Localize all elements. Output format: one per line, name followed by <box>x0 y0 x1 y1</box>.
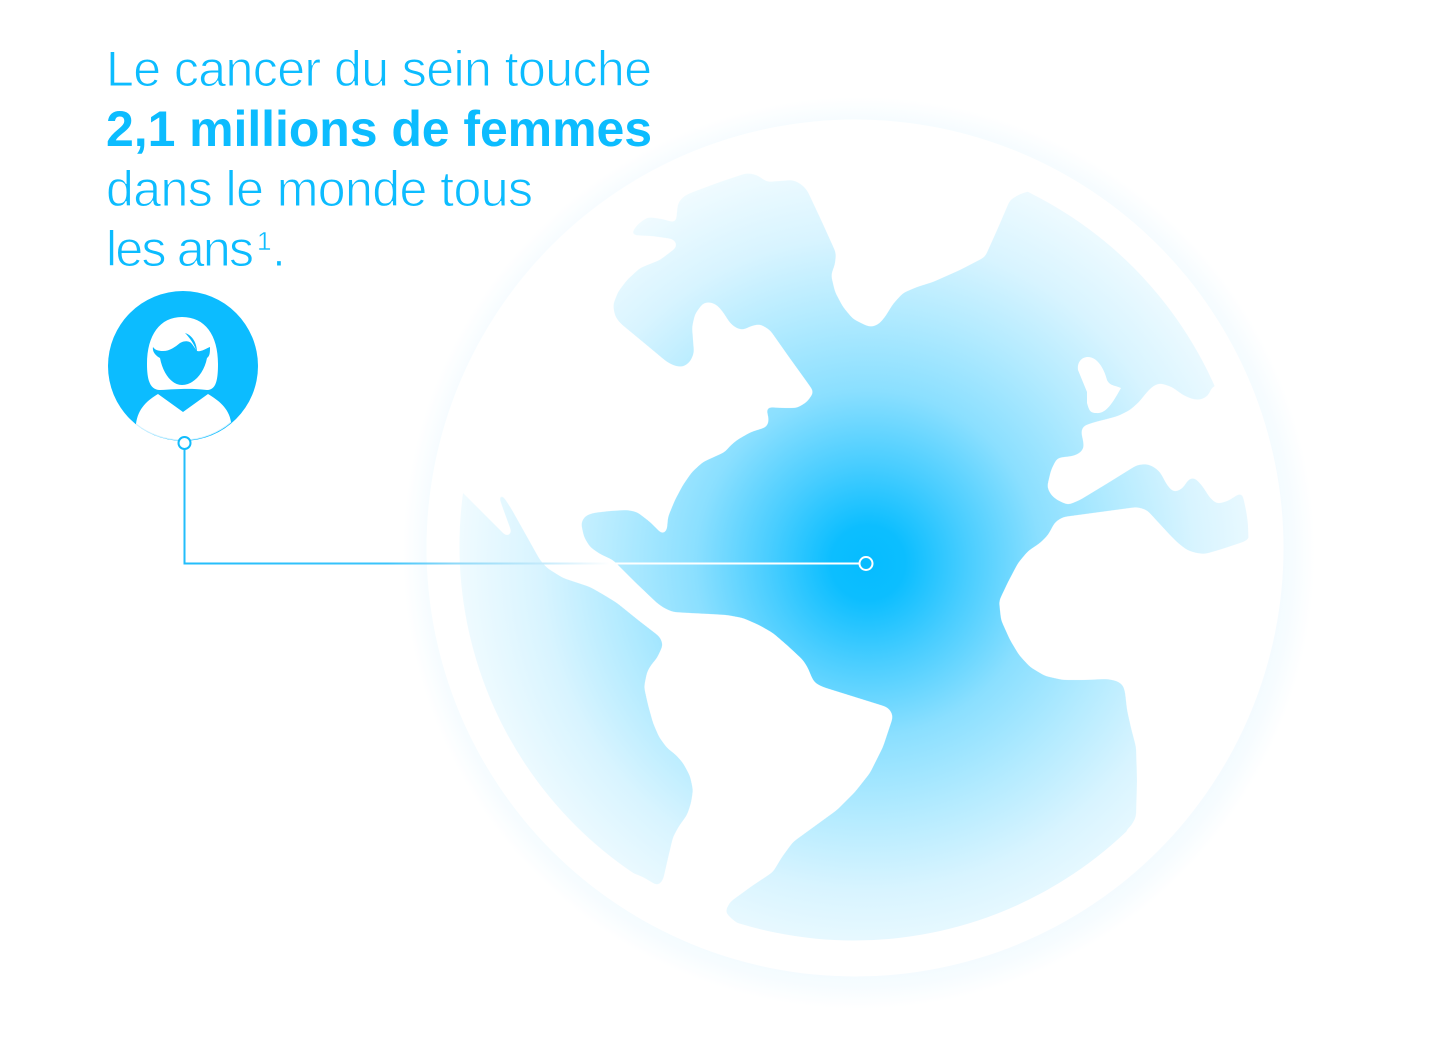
headline text: 1 <box>257 226 271 256</box>
avatar hair <box>147 317 218 390</box>
marker: globe ring <box>860 557 872 570</box>
globe <box>403 97 1315 1009</box>
headline text: 2,1 millions de femmes <box>106 101 652 157</box>
avatar body <box>136 394 231 440</box>
headline text <box>106 41 652 277</box>
globe halo <box>403 97 1315 1009</box>
connector line <box>184 449 859 564</box>
headline text: . <box>272 221 286 277</box>
avatar lower arc <box>136 422 231 440</box>
marker: top ring <box>178 437 190 449</box>
globe white disc <box>426 120 1284 976</box>
avatar hair strand <box>185 333 197 352</box>
headline text: Le cancer du sein touche <box>106 41 652 97</box>
avatar circle <box>108 291 258 441</box>
headline text: dans le monde tous <box>106 161 533 217</box>
icon: woman avatar <box>108 291 258 441</box>
avatar face <box>153 341 210 385</box>
ocean gradient clipped to continents <box>460 174 1248 940</box>
headline text: les ans <box>106 221 254 277</box>
